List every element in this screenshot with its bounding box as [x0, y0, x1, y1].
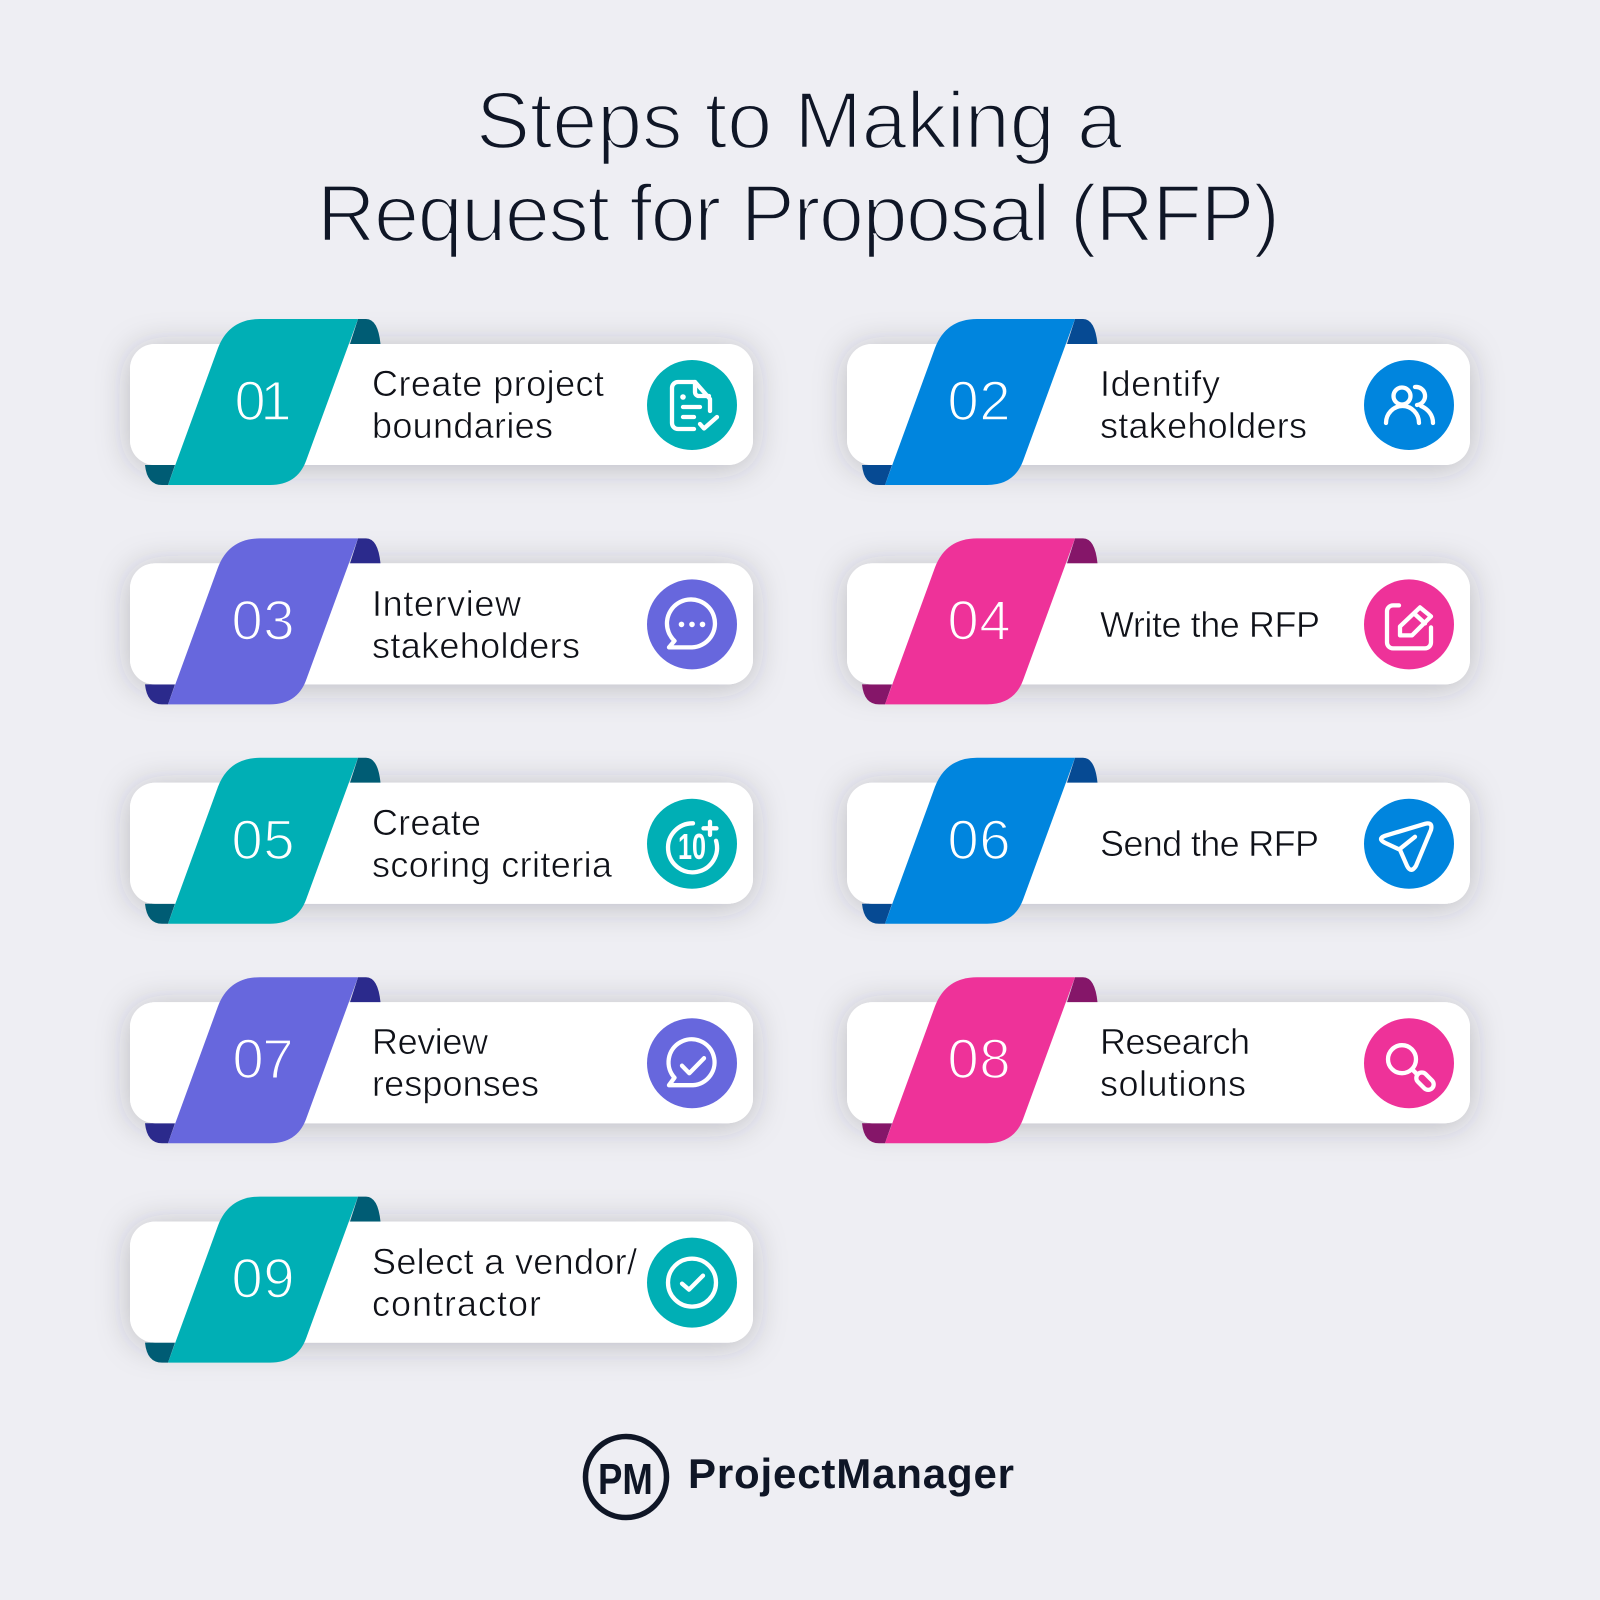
panel: step 02: Identify: [1100, 363, 1220, 404]
icon: speech bubble with dots: [667, 599, 715, 647]
panel: step 04: [847, 538, 1470, 704]
panel: step 03: Interview: [372, 583, 522, 624]
logo: ProjectManager: PM: [598, 1454, 653, 1504]
title: [317, 76, 1280, 259]
panel: step 09: contractor: [372, 1283, 541, 1324]
panel: step 01: [130, 319, 753, 485]
icon: check circle: [668, 1259, 716, 1307]
title: Request for Proposal (RFP): [317, 169, 1280, 259]
panel: step 06: [847, 758, 1470, 924]
panel: step 07: [130, 977, 753, 1143]
panel: step 08: [847, 977, 1470, 1143]
panel: step 07: responses: [372, 1063, 539, 1104]
panel: step 08: solutions: [1100, 1063, 1246, 1104]
panel: step 09: [130, 1197, 753, 1363]
logo: ProjectManager: [586, 1436, 1014, 1518]
panel: step 05: [130, 758, 753, 924]
panel: step 08: 08: [948, 1027, 1010, 1090]
icon: score ten plus: [668, 822, 717, 872]
icon: people: [1386, 387, 1433, 423]
panel: step 02: stakeholders: [1100, 405, 1307, 446]
panel: step 06: Send the RFP: [1100, 823, 1319, 864]
panel: step 04: Write the RFP: [1100, 604, 1320, 645]
panel: step 08: Research: [1100, 1021, 1250, 1062]
panel: step 02: [847, 319, 1470, 485]
panel: step 05: 05: [232, 808, 294, 871]
panel: step 07: Review: [372, 1021, 489, 1062]
panel: step 01: boundaries: [372, 405, 553, 446]
panel: step 03: stakeholders: [372, 625, 580, 666]
panel: step 09: 09: [232, 1247, 294, 1310]
title: Steps to Making a: [476, 76, 1123, 166]
panel: step 02: 02: [948, 369, 1010, 432]
panel: step 05: scoring criteria: [372, 844, 613, 885]
icon: document check: [672, 382, 717, 429]
panel: step 06: 06: [948, 808, 1010, 871]
panel: step 01: Create project: [372, 363, 604, 404]
icon: speech bubble with check: [669, 1039, 715, 1085]
logo: ProjectManager: ProjectManager: [688, 1450, 1014, 1497]
panel: step 03: 03: [232, 588, 294, 651]
panel: step 07: 07: [232, 1027, 294, 1090]
icon: edit pencil: [1387, 605, 1431, 648]
icon: magnifier: [1388, 1045, 1436, 1092]
icon: paper plane: [1381, 823, 1431, 870]
panel: step 04: 04: [948, 588, 1010, 651]
icon: score ten plus: 10: [678, 826, 706, 867]
panel: step 05: Create: [372, 802, 481, 843]
panel: step 03: [130, 538, 753, 704]
panel: step 09: Select a vendor/: [372, 1241, 637, 1282]
panel: step 01: 01: [234, 369, 292, 432]
